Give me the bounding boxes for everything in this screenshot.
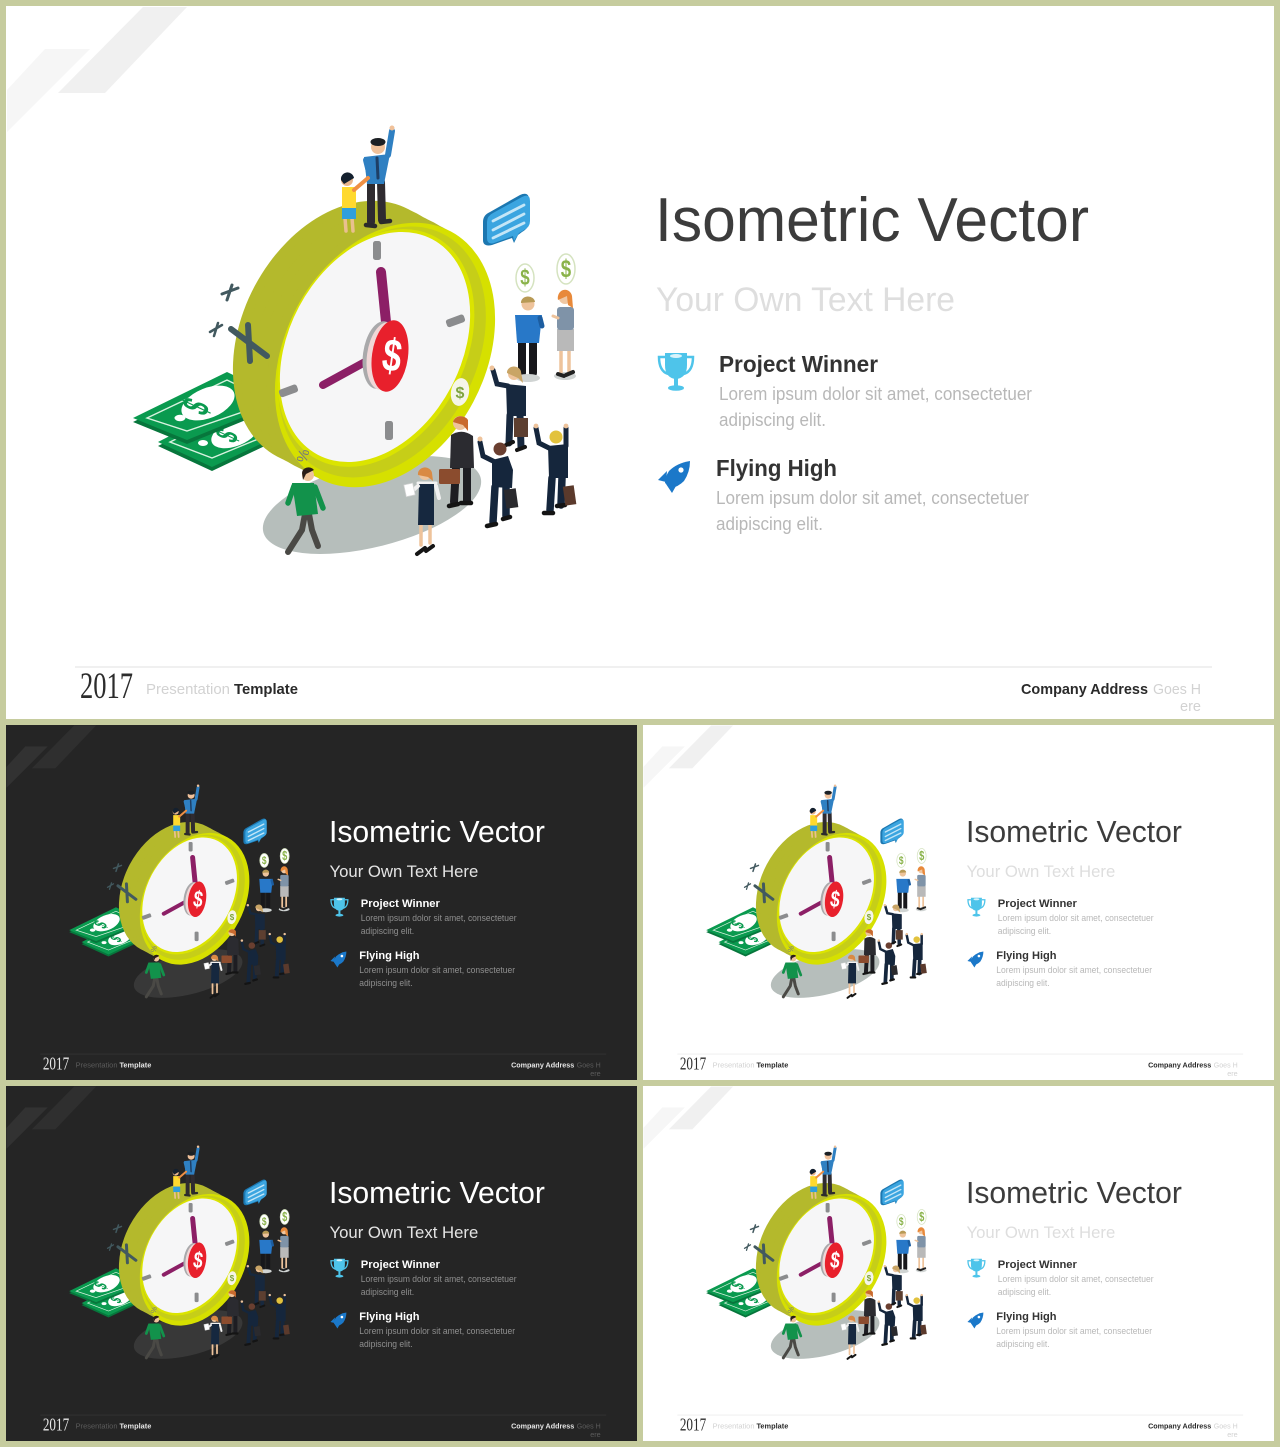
footer: Goes H: [1214, 1422, 1238, 1431]
text block: Project Winner: [361, 1259, 517, 1297]
text block: Project Winner: Project Winner: [998, 898, 1077, 910]
subtitle: Your Own Text Here: [656, 281, 955, 319]
footer: Presentation: [713, 1061, 754, 1070]
text block: Flying High: Flying High: [359, 950, 420, 962]
text block: Project Winner: Lorem ipsum dolor sit amet, consectetuer: [719, 384, 1032, 404]
clock centre dollar hub: [358, 318, 413, 394]
footer: Presentation: [146, 681, 230, 698]
text block: Flying High: adipiscing elit.: [359, 1339, 413, 1349]
footer: Company Address: [1148, 1061, 1211, 1070]
icon: trophy: [968, 898, 985, 917]
text block: Flying High: [359, 1311, 515, 1349]
icon: floating green dollar signs: [516, 254, 575, 292]
corner stripes decoration: [6, 725, 96, 788]
icon: rocket: [658, 461, 690, 493]
footer: Company Address: [1021, 681, 1148, 698]
text block: Flying High: Flying High: [359, 1311, 420, 1323]
title: Isometric Vector: [966, 1175, 1182, 1210]
person: child in yellow shirt: [341, 172, 368, 231]
text block: Project Winner: Lorem ipsum dolor sit amet, consectetuer: [361, 913, 517, 923]
text block: Project Winner: Project Winner: [361, 898, 440, 910]
corner stripes decoration: [643, 725, 733, 788]
icon: green dollar bills: $: [174, 392, 218, 421]
subtitle: Your Own Text Here: [966, 862, 1115, 881]
footer: Goes H: [1153, 681, 1201, 698]
icon: green dollar bills: $: [208, 423, 246, 448]
title: Isometric Vector: [966, 814, 1182, 849]
footer: Company Address: [511, 1061, 574, 1070]
clock body: [189, 162, 539, 526]
subtitle: Your Own Text Here: [966, 1223, 1115, 1242]
text block: Flying High: [996, 950, 1152, 988]
text block: Project Winner: Lorem ipsum dolor sit amet, consectetuer: [998, 913, 1154, 923]
text block: Flying High: Flying High: [716, 455, 837, 481]
clock hands: [323, 272, 386, 385]
illustration: isometric clock scene: [706, 1145, 927, 1368]
icon: dollar badge on rim: $: [456, 385, 465, 402]
panel: main white slide: [6, 6, 1274, 719]
footer: ere: [590, 1430, 601, 1439]
illustration: isometric clock scene: [69, 784, 290, 1007]
text block: Flying High: Lorem ipsum dolor sit amet, consectetuer: [359, 965, 515, 975]
icon: speech bubble: [483, 194, 530, 245]
text block: Project Winner: adipiscing elit.: [361, 1287, 414, 1297]
text block: Flying High: [359, 950, 515, 988]
footer: Template: [234, 681, 298, 698]
clock centre dollar hub: $: [379, 328, 405, 382]
text block: Project Winner: adipiscing elit.: [998, 926, 1051, 936]
footer: [677, 1054, 1243, 1078]
icon: rocket: [330, 952, 346, 967]
footer: ere: [1180, 698, 1201, 715]
text block: Project Winner: Project Winner: [719, 351, 878, 377]
text block: Flying High: Flying High: [996, 1311, 1057, 1323]
panel: small dark slide bottom left: [6, 1086, 637, 1441]
footer: 2017: [80, 666, 133, 707]
icon: green dollar bills: [133, 372, 290, 471]
icon: multiplication marks: [210, 285, 267, 361]
person: man on top of clock with raised arm: [364, 126, 394, 226]
footer: 2017: [680, 1415, 706, 1435]
icon: percent sign: %: [294, 447, 314, 464]
person: woman with papers: [404, 467, 439, 554]
icon: trophy: [659, 353, 693, 391]
subtitle: Your Own Text Here: [329, 1223, 478, 1242]
footer: Template: [756, 1061, 788, 1070]
text block: Project Winner: [361, 898, 517, 936]
icon: rocket: [967, 952, 983, 967]
footer: 2017: [43, 1054, 69, 1074]
icon: rocket: [967, 1313, 983, 1328]
text block: Flying High: adipiscing elit.: [996, 978, 1050, 988]
text block: Flying High: adipiscing elit.: [359, 978, 413, 988]
footer: Goes H: [577, 1061, 601, 1070]
corner stripes decoration: [643, 1086, 733, 1149]
footer: ere: [590, 1069, 601, 1078]
footer: [40, 1054, 606, 1078]
panel: small white slide bottom right: [643, 1086, 1274, 1441]
footer: Presentation: [76, 1061, 117, 1070]
text block: Flying High: Lorem ipsum dolor sit amet, consectetuer: [716, 488, 1029, 508]
icon: trophy: [331, 1259, 348, 1278]
icon: dollar badge on rim: [449, 377, 471, 407]
footer: Template: [119, 1061, 151, 1070]
text block: Flying High: [996, 1311, 1152, 1349]
text block: Project Winner: Lorem ipsum dolor sit amet, consectetuer: [998, 1274, 1154, 1284]
text block: Project Winner: Project Winner: [361, 1259, 440, 1271]
text block: Project Winner: [998, 898, 1154, 936]
text block: Project Winner: adipiscing elit.: [719, 410, 826, 430]
text block: Project Winner: Project Winner: [998, 1259, 1077, 1271]
panel: small dark slide top left: [6, 725, 637, 1080]
icon: floating green dollar signs: $: [520, 266, 530, 291]
footer: ere: [1227, 1430, 1238, 1439]
panel: small white slide top right: [643, 725, 1274, 1080]
corner stripes decoration: [6, 1086, 96, 1149]
footer: Template: [119, 1422, 151, 1431]
footer: Goes H: [1214, 1061, 1238, 1070]
footer: Goes H: [577, 1422, 601, 1431]
footer: [40, 1415, 606, 1439]
person: navy suit man from behind with black briefcase: [478, 436, 518, 526]
illustration: isometric clock scene: [69, 1145, 290, 1368]
text block: Flying High: Lorem ipsum dolor sit amet, consectetuer: [359, 1326, 515, 1336]
footer: 2017: [43, 1415, 69, 1435]
text block: Project Winner: [719, 351, 1032, 430]
footer: [677, 1415, 1243, 1439]
text block: Flying High: Lorem ipsum dolor sit amet, consectetuer: [996, 965, 1152, 975]
footer: Company Address: [1148, 1422, 1211, 1431]
person: blond man with both arms raised: [534, 424, 576, 513]
icon: floating green dollar signs: $: [561, 254, 572, 283]
title: Isometric Vector: [655, 186, 1089, 255]
text block: Project Winner: [998, 1259, 1154, 1297]
text block: Project Winner: adipiscing elit.: [998, 1287, 1051, 1297]
person: man in dark suit with brown briefcase: [439, 416, 474, 506]
icon: rocket: [330, 1313, 346, 1328]
clock hour ticks: [278, 241, 466, 440]
footer: Company Address: [511, 1422, 574, 1431]
title: Isometric Vector: [329, 1175, 545, 1210]
icon: trophy: [331, 898, 348, 917]
corner stripes decoration: [7, 7, 187, 132]
text block: Flying High: adipiscing elit.: [996, 1339, 1050, 1349]
text block: Project Winner: Lorem ipsum dolor sit amet, consectetuer: [361, 1274, 517, 1284]
footer: [75, 666, 1212, 715]
illustration: isometric clock scene: [133, 126, 576, 573]
text block: Flying High: adipiscing elit.: [716, 514, 823, 534]
text block: Project Winner: adipiscing elit.: [361, 926, 414, 936]
text block: Flying High: [716, 455, 1029, 534]
person: navy suit man with raised hand and briefcase: [490, 366, 528, 450]
text block: Flying High: Flying High: [996, 950, 1057, 962]
person: man in blue shirt with phone: [515, 296, 542, 382]
footer: ere: [1227, 1069, 1238, 1078]
footer: 2017: [680, 1054, 706, 1074]
clock ground shadow: [253, 437, 491, 573]
footer: Template: [756, 1422, 788, 1431]
subtitle: Your Own Text Here: [329, 862, 478, 881]
icon: trophy: [968, 1259, 985, 1278]
footer: Presentation: [76, 1422, 117, 1431]
person: woman with orange hair: [553, 290, 576, 380]
title: Isometric Vector: [329, 814, 545, 849]
footer: Presentation: [713, 1422, 754, 1431]
text block: Flying High: Lorem ipsum dolor sit amet, consectetuer: [996, 1326, 1152, 1336]
person: man in green walking: [288, 467, 323, 552]
illustration: isometric clock scene: [706, 784, 927, 1007]
